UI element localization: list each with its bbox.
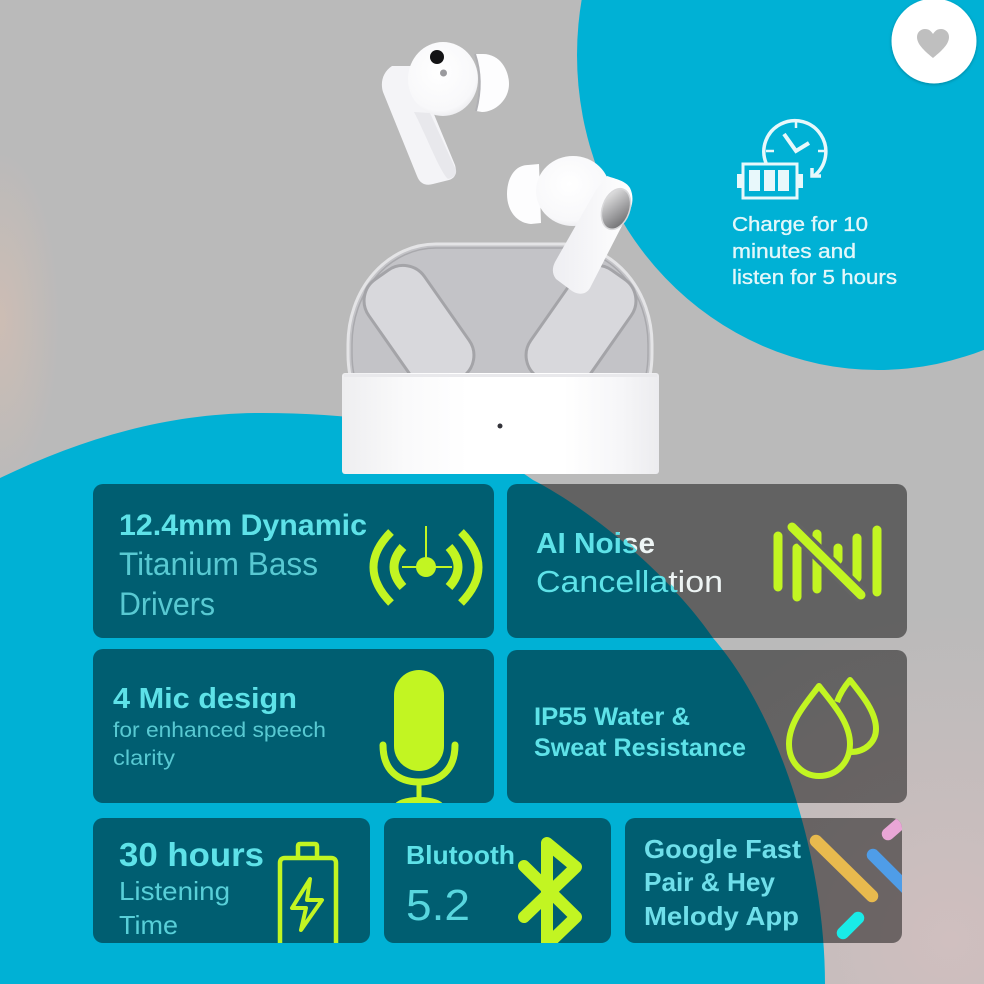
earbud: bottom right (507, 156, 636, 294)
text: battery life: Listening (119, 876, 230, 906)
earbud: top left (382, 42, 509, 185)
heading: microphones: 4 Mic design (113, 683, 297, 715)
text: drivers (119, 546, 318, 622)
icon: bluetooth (524, 843, 576, 945)
text: charge time: listen for 5 hours (732, 267, 897, 289)
heading: bluetooth: Blutooth (406, 840, 515, 870)
text: charge time: minutes and (732, 241, 856, 263)
panel: bluetooth (384, 818, 611, 945)
text: water resistance: Sweat Resistance (534, 734, 746, 762)
blue circle: top right (577, 0, 984, 370)
right pad (524, 264, 638, 373)
text: app: Pair & Hey (644, 867, 776, 897)
product: earbuds and charging case (342, 42, 659, 474)
callout: fast charge (732, 120, 897, 289)
text: battery life (119, 876, 230, 940)
left pad (362, 264, 476, 373)
panel: water resistance (507, 650, 907, 803)
blue circle: bottom left (0, 413, 825, 984)
icon: noise cancelled (778, 525, 877, 597)
text: microphones: clarity (113, 747, 176, 770)
panel: drivers (93, 484, 494, 638)
text: battery life: Time (119, 910, 178, 940)
panel: app (625, 815, 910, 943)
text: water resistance (534, 703, 746, 762)
icon: battery (280, 844, 336, 950)
text: app (644, 834, 801, 931)
favourite button (892, 0, 976, 84)
text: microphones (113, 719, 326, 770)
panel: battery life (93, 818, 370, 950)
heading: drivers: 12.4mm Dynamic (119, 509, 367, 542)
text: drivers: Drivers (119, 586, 215, 622)
text: microphones: for enhanced speech (113, 719, 326, 742)
text: charge time (732, 214, 897, 289)
icon: driver waves (374, 526, 478, 603)
icon: microphone (383, 670, 455, 813)
icon: water drops (789, 680, 876, 776)
charging case base (342, 373, 659, 474)
text: noise cancellation: Cancellation (536, 564, 723, 599)
text: water resistance: IP55 Water & (534, 703, 690, 731)
heading: noise cancellation: AI Noise (536, 528, 655, 560)
panel: noise cancellation (507, 484, 907, 638)
panel: microphones (93, 649, 494, 813)
heading: battery life: 30 hours (119, 836, 264, 873)
text: charge time: Charge for 10 (732, 214, 868, 236)
text: drivers: Titanium Bass (119, 546, 318, 582)
text: app: Melody App (644, 901, 799, 931)
icon: heart (917, 29, 949, 58)
text: app: Google Fast (644, 834, 801, 864)
icon: clock and battery (737, 120, 827, 198)
charging case lid (346, 242, 654, 373)
text: version: 5.2 (406, 881, 470, 930)
icon: app colour bars (816, 815, 910, 933)
